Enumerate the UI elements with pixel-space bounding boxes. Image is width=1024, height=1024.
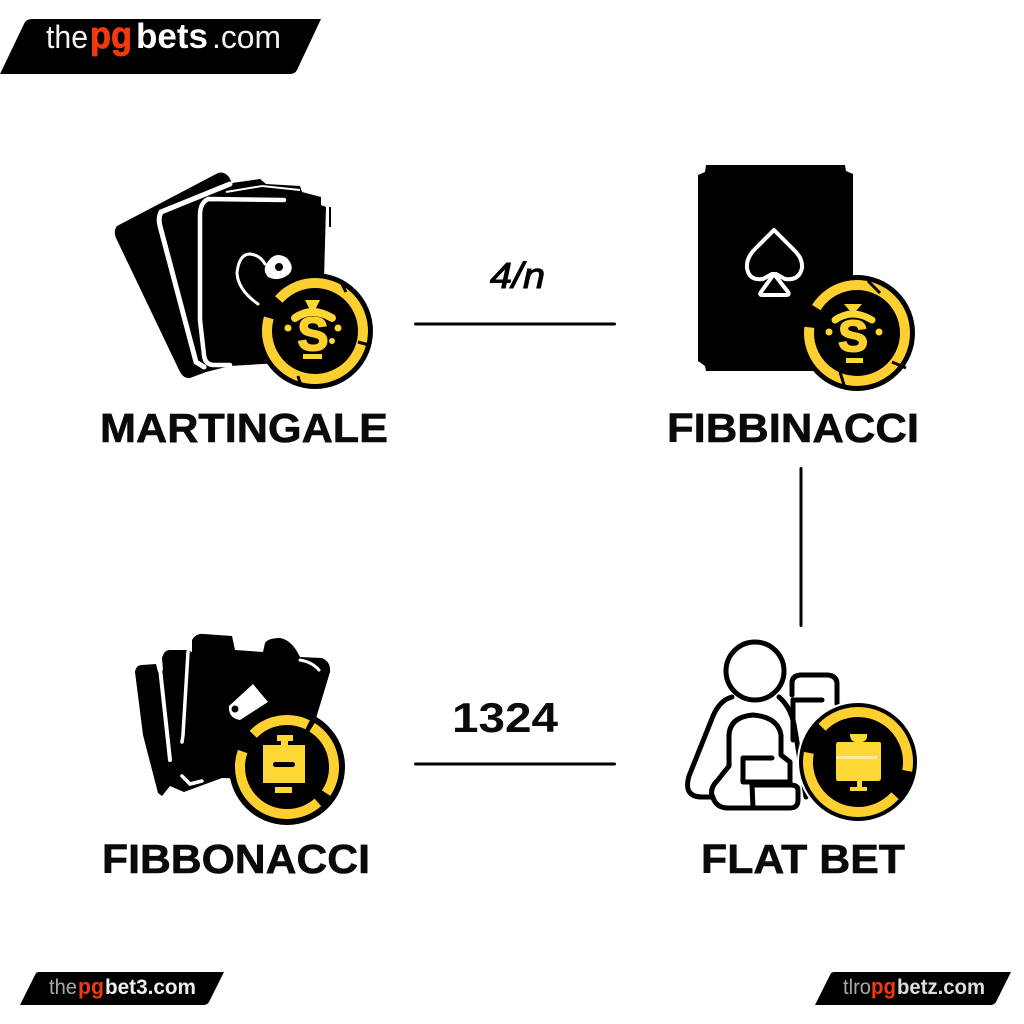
- shoulders: [688, 697, 732, 797]
- icon: flat bet person and chip: [688, 642, 929, 833]
- icon: martingale cards and chip: [115, 172, 383, 399]
- connector: top with label: [414, 255, 616, 326]
- logo: top left banner: [0, 15, 321, 74]
- spade suit: [747, 230, 802, 279]
- connector: right vertical: [800, 467, 802, 627]
- logo: bottom right banner: [815, 972, 1011, 1005]
- heading: fibbinaci: FIBBINACCI: [667, 405, 919, 451]
- connector: top with label: 4/n: [490, 255, 545, 296]
- card suit outline: [237, 254, 265, 304]
- white mini card: [229, 684, 268, 720]
- stack: [792, 675, 837, 704]
- icon: fibbinaci card and chip: [698, 165, 923, 399]
- briefcase: [263, 735, 305, 783]
- inner figure: [729, 715, 790, 762]
- chip: [257, 273, 373, 389]
- logo: bottom right banner: pg: [871, 974, 896, 999]
- briefcase: [836, 734, 881, 791]
- card outline white 2: [159, 212, 204, 367]
- logo: top left banner: bets: [136, 17, 208, 56]
- icon: martingale cards and chip: S: [298, 308, 328, 360]
- card outline white 3: [200, 199, 284, 365]
- head: [726, 642, 784, 700]
- connector: bottom with label: 1324: [452, 694, 559, 741]
- logo: bottom left banner: pg: [78, 974, 104, 999]
- logo: bottom left banner: the: [49, 976, 77, 999]
- logo: bottom right banner: tlro: [843, 976, 871, 999]
- connector: bottom with label: [414, 694, 616, 766]
- laptop: [743, 758, 790, 782]
- black card silhouette: [135, 634, 330, 796]
- heading: flat bet: FLAT BET: [701, 836, 905, 882]
- white card gaps: [160, 668, 170, 760]
- logo: top left banner: .com: [212, 19, 281, 55]
- chip: [229, 709, 345, 825]
- icon: fibbonacci cards and chip: [135, 634, 353, 833]
- logo: top left banner: pg: [90, 15, 132, 57]
- side sliver: [329, 207, 331, 227]
- logo: bottom right banner: betz.com: [897, 976, 985, 999]
- chip: [798, 702, 918, 822]
- heading: martingale: MARTINGALE: [100, 405, 388, 451]
- card silhouette: [115, 172, 327, 378]
- icon: fibbinaci card and chip: S: [838, 312, 868, 361]
- card: [698, 165, 853, 371]
- chip: [799, 275, 915, 391]
- logo: bottom left banner: bet3.com: [105, 976, 196, 999]
- heading: fibbonacci: FIBBONACCI: [102, 836, 370, 882]
- logo: bottom left banner: [20, 972, 224, 1005]
- logo: top left banner: the: [46, 19, 88, 55]
